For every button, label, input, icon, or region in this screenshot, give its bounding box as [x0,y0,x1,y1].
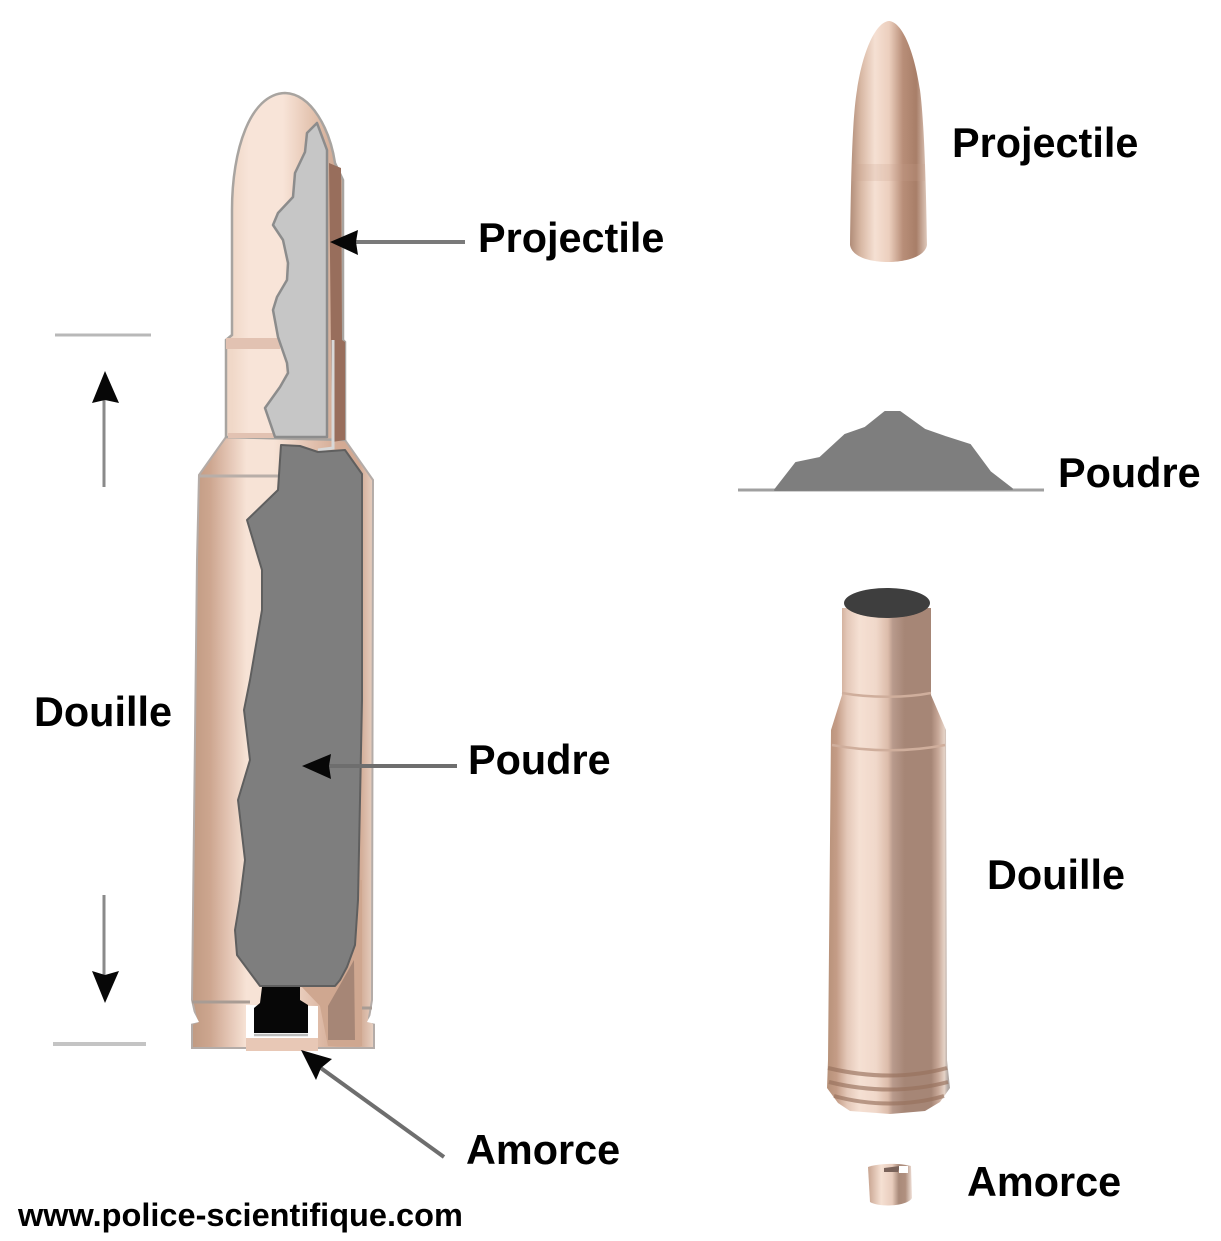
down arrow [92,895,119,1003]
primer charge [254,987,308,1033]
neck and shoulder lines [832,693,945,750]
component: primer [868,1164,912,1205]
powder charge [235,445,362,986]
case mouth [844,588,930,618]
bottom tick [53,1042,146,1046]
brown inner wall of case [328,960,355,1040]
label: projectile right: Projectile [952,120,1138,166]
rim grooves [828,1068,948,1104]
bullet jacket [226,93,345,440]
case body [192,437,374,1048]
arrow: projectile [330,230,465,255]
component: powder pile [738,412,1044,490]
label: poudre right: Poudre [1058,450,1201,496]
top tick [55,334,151,336]
component: cartridge case [827,588,950,1114]
label: douille: Douille [34,689,172,735]
cartridge cutaway [190,93,376,1051]
neck bands [226,338,280,438]
label: amorce right: Amorce [967,1159,1121,1205]
extractor groove [190,1005,376,1024]
primer cup [246,1005,318,1050]
label: poudre: Poudre [468,737,611,783]
website credit: www.police-scientifique.com [17,1197,463,1233]
label: amorce: Amorce [466,1127,620,1173]
up arrow [92,371,119,487]
projectile core [265,123,327,437]
arrow: amorce [301,1050,444,1157]
tan case wall at base [300,880,362,1046]
dimension: douille [34,335,172,1044]
label: douille right: Douille [987,852,1125,898]
arrow: poudre [302,754,457,779]
component: projectile [850,21,927,262]
label: projectile: Projectile [478,215,664,261]
brown inner wall of jacket [329,163,345,442]
